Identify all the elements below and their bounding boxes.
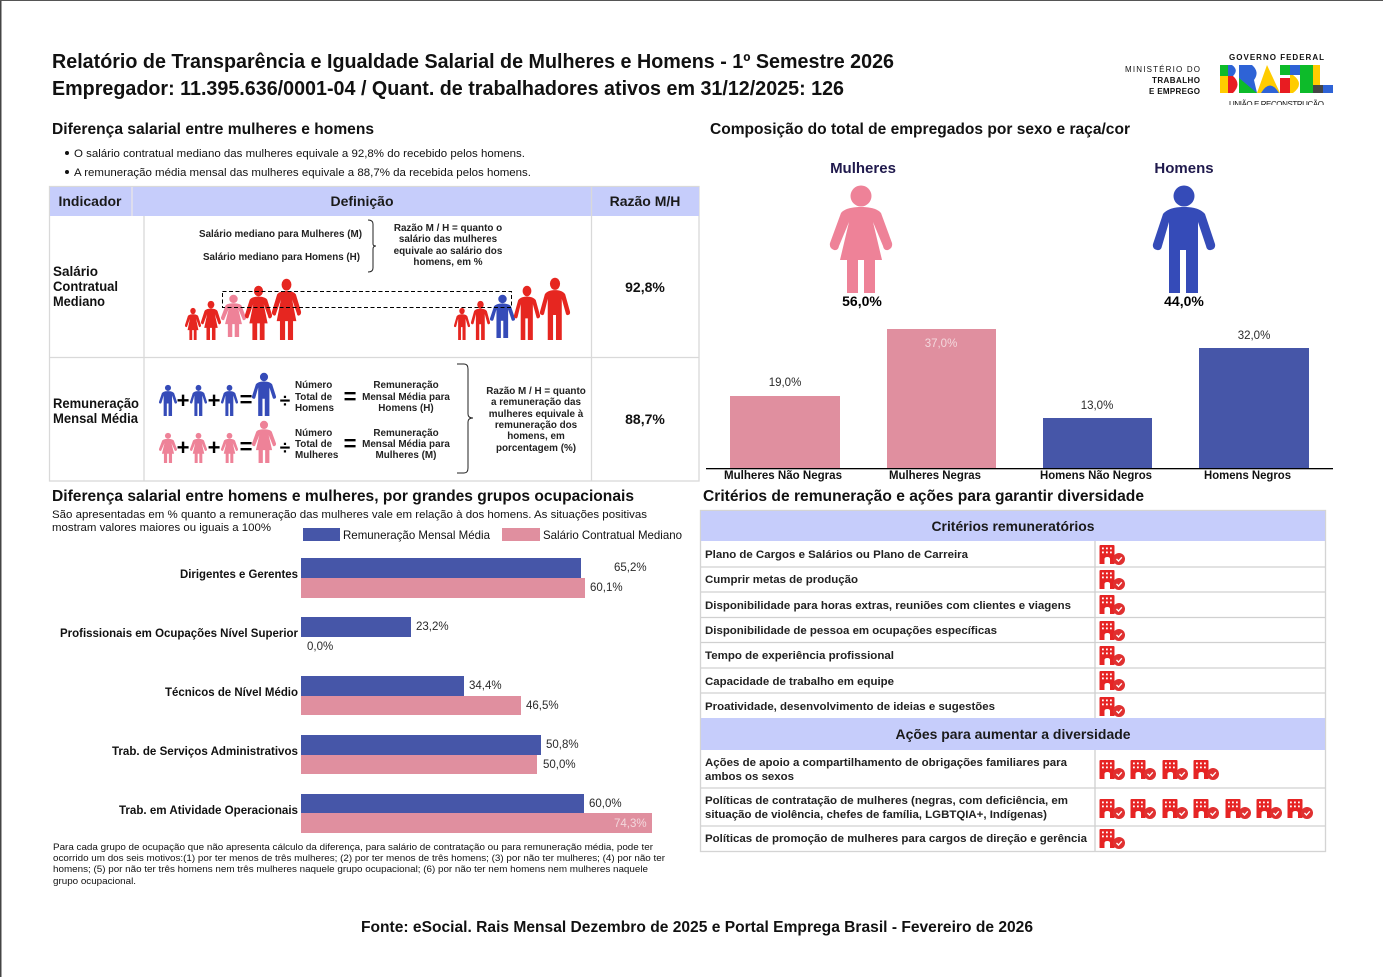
bar chart: sexo e raça: 32,0%	[1238, 330, 1270, 342]
bar chart: sexo e raça: Mulheres Não Negras	[724, 470, 842, 482]
row label: salário contratual mediano: Contratual	[53, 279, 118, 294]
logo: governo federal brasil: GOVERNO FEDERAL	[1229, 53, 1324, 62]
bar chart: ocupações	[60, 558, 652, 833]
logo: ministério	[1125, 65, 1200, 96]
legend: Salário Contratual Mediano	[543, 528, 682, 542]
row label: salário contratual mediano: Mediano	[53, 294, 105, 309]
panel: diferença salarial	[50, 121, 699, 481]
table: critérios remuneratórios: Disponibilidade de pessoa em ocupações específicas	[705, 625, 997, 637]
bar chart: ocupações: 60,1%	[590, 582, 623, 594]
brace and explanation: mulheres equivale à	[489, 409, 584, 420]
formula: homens	[159, 373, 450, 416]
bullet text: A remuneração média mensal das mulheres equivale a 88,7% da recebida pelos homens.	[74, 167, 531, 179]
formula: homens: Homens (H)	[378, 403, 434, 414]
bar chart: sexo e raça: Homens Negros	[1204, 470, 1291, 482]
brace and explanation	[457, 364, 586, 473]
logo: ministério: E EMPREGO	[1149, 87, 1200, 96]
bar chart: ocupações: Trab. em Atividade Operacionais	[119, 805, 298, 817]
formula: homens: Mensal Média para	[362, 392, 450, 403]
formula: mulheres: Mensal Média para	[362, 439, 450, 450]
row label: salário contratual mediano	[53, 264, 118, 309]
formula: mulheres: Número	[295, 428, 332, 439]
subtitle	[52, 509, 648, 534]
formula: mulheres: =	[240, 434, 252, 459]
panel: grupos ocupacionais	[52, 488, 682, 886]
bar chart: sexo e raça: 37,0%	[925, 338, 957, 350]
definition text: salário mediano: Razão M / H = quanto o	[394, 223, 502, 234]
icon group: família mulheres	[185, 279, 301, 340]
figure: mulheres: 56,0%	[842, 293, 882, 309]
formula: homens: =	[240, 387, 252, 412]
table: ações diversidade: Políticas de contratação de mulheres (negras, com deficiência, em	[705, 795, 1068, 807]
heading: grupos ocupacionais: Diferença salarial entre homens e mulheres, por grandes grupos ocupacionais	[52, 488, 634, 505]
brace and explanation: porcentagem (%)	[496, 443, 576, 454]
value: 92,8%: 92,8%	[625, 279, 665, 295]
heading: composição: Composição do total de empregados por sexo e raça/cor	[710, 121, 1130, 138]
footnote	[53, 842, 665, 886]
brace and explanation: Razão M / H = quanto	[486, 386, 586, 397]
bar chart: sexo e raça: Homens Não Negros	[1040, 470, 1152, 482]
table: critérios remuneratórios: Cumprir metas de produção	[705, 574, 858, 586]
table: indicadores: Razão M/H	[610, 193, 680, 209]
source: Fonte: eSocial. Rais Mensal Dezembro de 2025 e Portal Emprega Brasil - Fevereiro de 2026	[361, 919, 1033, 936]
formula: mulheres: Remuneração	[373, 428, 439, 439]
table: critérios remuneratórios: Tempo de experiência profissional	[705, 650, 894, 662]
formula: mulheres: Total de	[295, 439, 333, 450]
title: Empregador: 11.395.636/0001-04 / Quant. de trabalhadores ativos em 31/12/2025: 126	[52, 78, 844, 100]
formula: mulheres: =	[344, 431, 356, 456]
formula: homens: Total de	[295, 392, 333, 403]
table: ações diversidade: Ações de apoio a compartilhamento de obrigações familiares para	[705, 757, 1068, 769]
bar chart: sexo e raça: 19,0%	[769, 377, 801, 389]
legend	[303, 528, 682, 542]
definition text: salário mediano: equivale ao salário dos	[394, 246, 503, 257]
row label: salário contratual mediano: Salário	[53, 264, 98, 279]
formula: homens: =	[344, 384, 356, 409]
bar chart: ocupações: 50,0%	[543, 759, 576, 771]
formula: homens: +	[208, 388, 220, 413]
formula: mulheres: ÷	[280, 438, 290, 459]
formula: homens: +	[177, 388, 189, 413]
figure: homens: Homens	[1154, 160, 1214, 177]
bar chart: ocupações: 0,0%	[307, 641, 333, 653]
bar chart: ocupações: 50,8%	[546, 739, 579, 751]
formula: mulheres: Mulheres (M)	[376, 450, 436, 461]
table: indicadores: Definição	[330, 193, 394, 209]
brace and explanation: remuneração dos	[495, 420, 578, 431]
bar chart: ocupações: Técnicos de Nível Médio	[165, 687, 298, 699]
legend: Remuneração Mensal Média	[343, 528, 490, 542]
formula: homens: Homens	[295, 403, 334, 414]
table: critérios remuneratórios: Proatividade, desenvolvimento de ideias e sugestões	[705, 701, 995, 713]
logo: ministério: TRABALHO	[1152, 76, 1200, 85]
bar chart: ocupações: 60,0%	[589, 798, 622, 810]
table: ações diversidade: ambos os sexos	[705, 771, 794, 783]
figure: homens: 44,0%	[1164, 293, 1204, 309]
definition text: salário mediano: Salário mediano para Mulheres (M)	[199, 229, 362, 240]
heading: diferença salarial: Diferença salarial entre mulheres e homens	[52, 121, 374, 138]
subtitle: São apresentadas em % quanto a remuneração das mulheres vale em relação à dos homens. As situações positivas	[52, 509, 648, 521]
table: ações diversidade: situação de violência, chefes de família, LGBTQIA+, Indígenas)	[705, 809, 1047, 821]
table: ações diversidade: Políticas de promoção de mulheres para cargos de direção e gerência	[705, 833, 1088, 845]
subtitle: mostram valores maiores ou iguais a 100%	[52, 522, 271, 534]
row label: remuneração mensal média	[53, 396, 139, 426]
bar chart: ocupações: 34,4%	[469, 680, 502, 692]
bar chart: sexo e raça	[706, 329, 1333, 482]
logo: governo federal brasil: UNIÃO E RECONSTRUÇÃO	[1229, 100, 1324, 109]
bar chart: ocupações: 74,3%	[614, 818, 647, 830]
footnote: ocorrido um dos seis motivos:(1) por ter menos de três mulheres; (2) por ter menos de três homens; (3) por não ter mulheres; (4) por não ter	[53, 853, 665, 863]
title: Relatório de Transparência e Igualdade Salarial de Mulheres e Homens - 1º Semestre 2026	[52, 51, 894, 73]
table: ações diversidade	[705, 726, 1313, 849]
bar chart: ocupações: 23,2%	[416, 621, 449, 633]
formula: mulheres	[159, 421, 450, 463]
value: 88,7%: 88,7%	[625, 411, 665, 427]
logo: ministério: MINISTÉRIO DO	[1125, 65, 1200, 74]
brace and explanation: a remuneração das	[491, 397, 582, 408]
bar chart: ocupações: 65,2%	[614, 562, 647, 574]
panel: composição	[706, 121, 1333, 482]
definition text: salário mediano: salário das mulheres	[399, 234, 498, 245]
table: critérios remuneratórios: Disponibilidade para horas extras, reuniões com clientes e viagens	[705, 600, 1071, 612]
heading: critérios: Critérios de remuneração e ações para garantir diversidade	[703, 488, 1144, 505]
definition text: salário mediano	[199, 220, 503, 272]
formula: mulheres: +	[177, 435, 189, 460]
figure: homens	[1153, 160, 1215, 309]
definition text: salário mediano: homens, em %	[413, 257, 483, 268]
row label: remuneração mensal média: Remuneração	[53, 396, 139, 411]
table: indicadores: Indicador	[58, 193, 122, 209]
bar chart: ocupações: Trab. de Serviços Administrativos	[112, 746, 298, 758]
figure: mulheres	[830, 160, 896, 309]
table: critérios remuneratórios: Plano de Cargos e Salários ou Plano de Carreira	[705, 549, 969, 561]
logo: governo federal brasil	[1220, 53, 1333, 109]
icon group: família homens	[454, 278, 570, 340]
bullet text: O salário contratual mediano das mulheres equivale a 92,8% do recebido pelos homens.	[74, 148, 525, 160]
table: critérios remuneratórios: Capacidade de trabalho em equipe	[705, 676, 894, 688]
table: ações diversidade: Ações para aumentar a diversidade	[896, 726, 1131, 742]
formula: homens: ÷	[280, 391, 290, 412]
formula: mulheres: +	[208, 435, 220, 460]
panel: critérios e ações	[700, 488, 1326, 852]
formula: homens: Remuneração	[373, 380, 439, 391]
table: indicadores	[50, 186, 699, 481]
row label: remuneração mensal média: Mensal Média	[53, 411, 138, 426]
table: critérios remuneratórios: Critérios remuneratórios	[932, 518, 1095, 534]
bar chart: sexo e raça: Mulheres Negras	[889, 470, 981, 482]
formula: homens: Número	[295, 380, 332, 391]
footnote: homens; (5) por não ter três homens nem três mulheres naquele grupo ocupacional; (6) por não ter nem homens nem mulheres naquele	[53, 864, 648, 874]
bar chart: ocupações: Profissionais em Ocupações Nível Superior	[60, 628, 299, 640]
footnote: Para cada grupo de ocupação que não apresenta cálculo da diferença, para salário de contratação ou para remuneração média, pode ter	[53, 842, 653, 852]
brace and explanation: homens, em	[507, 431, 565, 442]
definition text: salário mediano: Salário mediano para Homens (H)	[203, 252, 360, 263]
title	[52, 51, 894, 100]
bar chart: ocupações: Dirigentes e Gerentes	[180, 569, 298, 581]
footnote: grupo ocupacional.	[53, 876, 136, 886]
bar chart: sexo e raça: 13,0%	[1081, 400, 1113, 412]
figure: mulheres: Mulheres	[830, 160, 896, 177]
formula: mulheres: Mulheres	[295, 450, 339, 461]
bar chart: ocupações: 46,5%	[526, 700, 559, 712]
bullet text	[65, 148, 531, 179]
table: critérios remuneratórios	[700, 510, 1326, 852]
